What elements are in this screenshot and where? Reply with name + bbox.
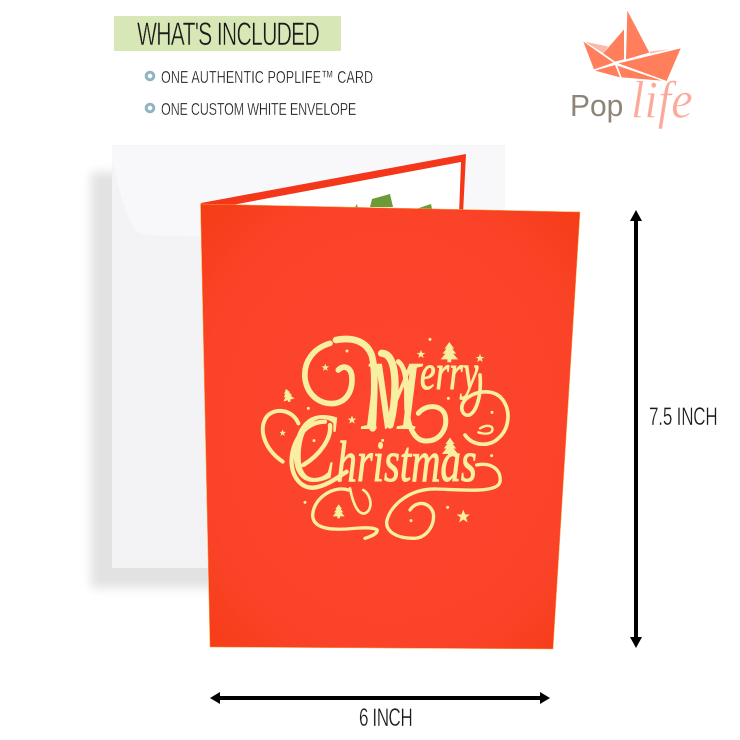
item two: ONE CUSTOM WHITE ENVELOPE <box>161 100 356 120</box>
width arrow <box>210 692 550 704</box>
flourishes <box>263 339 508 538</box>
pop-up tree tips <box>354 194 432 209</box>
height arrow <box>630 210 642 648</box>
bullet two <box>146 104 154 112</box>
logo word life: life <box>631 69 693 129</box>
logo word Pop: Pop <box>570 89 623 123</box>
card interior <box>227 162 461 214</box>
envelope flap <box>112 146 505 236</box>
card front <box>200 204 580 649</box>
Poplife logo <box>570 11 693 129</box>
stars and dots <box>279 338 493 522</box>
envelope <box>112 145 505 568</box>
paper boat <box>583 11 681 81</box>
Christmas text: Christmas <box>290 392 477 503</box>
heading banner <box>114 15 341 52</box>
Merry Christmas lettering <box>263 338 508 538</box>
Merry text: M <box>362 340 445 451</box>
bullet one <box>146 72 154 80</box>
envelope shadow <box>91 172 231 588</box>
card back panel <box>201 154 466 214</box>
item one: ONE AUTHENTIC POPLIFE™ CARD <box>161 68 373 88</box>
height label: 7.5 INCH <box>649 403 718 431</box>
width label: 6 INCH <box>359 704 413 732</box>
included items list <box>146 68 373 120</box>
Merry text: erry <box>420 344 479 400</box>
heading text: WHAT'S INCLUDED <box>137 15 320 52</box>
